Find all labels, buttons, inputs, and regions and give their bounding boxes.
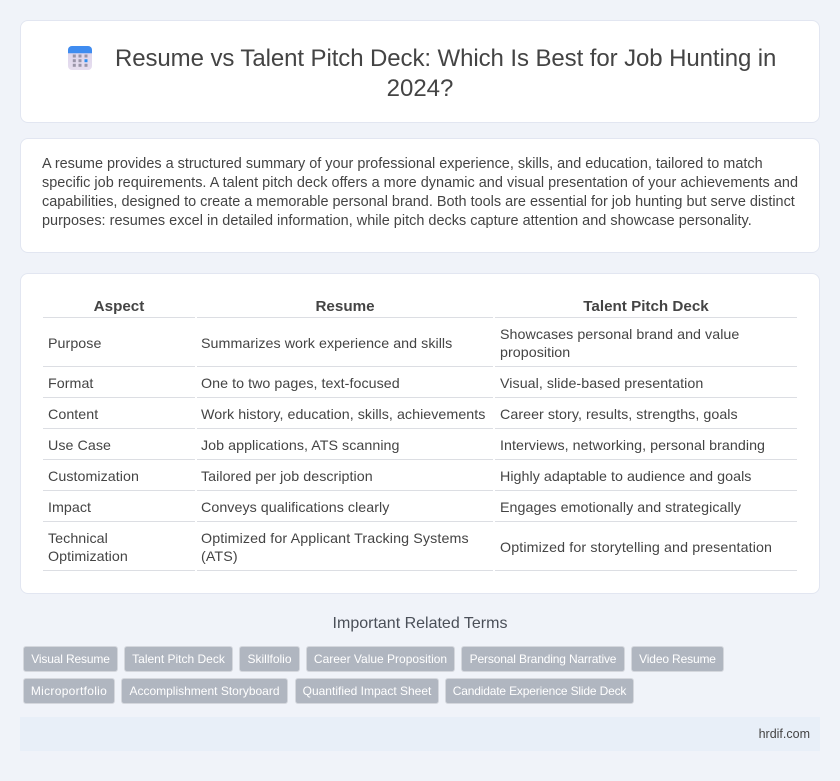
intro text: purposes: resumes excel in detailed information, while pitch decks capture attention and showcase personality. xyxy=(42,213,752,229)
title xyxy=(115,45,776,102)
row: Impact: Impact xyxy=(48,500,91,516)
tag: Video Resume xyxy=(639,652,716,666)
intro text: specific job requirements. A talent pitch deck offers a more dynamic and visual presentation of your achievements and xyxy=(42,175,798,191)
tag xyxy=(124,646,233,672)
row: Customization: Highly adaptable to audience and goals xyxy=(500,469,751,485)
row: Use Case xyxy=(48,438,765,454)
table header xyxy=(94,298,709,315)
tag xyxy=(461,646,625,672)
footer bar xyxy=(20,717,820,751)
row: Technical Optimization: Optimized for storytelling and presentation xyxy=(500,540,772,556)
intro text: A resume provides a structured summary of your professional experience, skills, and education, tailored to match xyxy=(42,156,763,172)
row: Technical Optimization: Technical xyxy=(48,531,108,547)
table panel xyxy=(20,273,820,594)
row: Use Case: Job applications, ATS scanning xyxy=(201,438,399,454)
row: Technical Optimization xyxy=(48,531,772,565)
table header: Resume xyxy=(315,298,375,315)
row: Format: One to two pages, text-focused xyxy=(201,376,400,392)
row: Use Case: Interviews, networking, personal branding xyxy=(500,438,765,454)
row: Impact: Engages emotionally and strategically xyxy=(500,500,741,516)
row: Purpose: Summarizes work experience and skills xyxy=(201,336,452,352)
tag: Quantified Impact Sheet xyxy=(303,684,431,698)
row: Technical Optimization: Optimized for Applicant Tracking Systems xyxy=(201,531,469,547)
tag: Microportfolio xyxy=(31,684,107,698)
row: Purpose: Purpose xyxy=(48,336,101,352)
row: Format: Format xyxy=(48,376,93,392)
row: Content: Career story, results, strengths, goals xyxy=(500,407,738,423)
related terms heading: Important Related Terms xyxy=(333,615,507,632)
row: Content: Content xyxy=(48,407,98,423)
row: Impact xyxy=(48,500,741,516)
row: Impact: Conveys qualifications clearly xyxy=(201,500,389,516)
row: Use Case: Use Case xyxy=(48,438,111,454)
row: Technical Optimization: (ATS) xyxy=(201,549,238,565)
intro text: capabilities, designed to create a memorable personal brand. Both tools are essential for job hunting but serve distinct xyxy=(42,194,795,210)
tag xyxy=(121,678,288,704)
row: Content xyxy=(48,407,738,423)
row: Purpose: Showcases personal brand and value xyxy=(500,327,739,343)
intro text xyxy=(42,156,798,229)
tag xyxy=(239,646,300,672)
tag: Accomplishment Storyboard xyxy=(129,684,280,698)
row: Purpose xyxy=(48,327,739,361)
tag xyxy=(295,678,439,704)
row: Format xyxy=(48,376,703,392)
tag: Talent Pitch Deck xyxy=(132,652,225,666)
tag: Skillfolio xyxy=(247,652,292,666)
related term tags xyxy=(23,646,724,704)
row: Customization: Customization xyxy=(48,469,139,485)
tag xyxy=(631,646,724,672)
tag: Candidate Experience Slide Deck xyxy=(453,684,626,698)
comparison table xyxy=(43,298,797,571)
intro panel xyxy=(20,138,820,253)
row: Purpose: proposition xyxy=(500,345,570,361)
tag: Personal Branding Narrative xyxy=(470,652,616,666)
tag xyxy=(23,678,115,704)
tag xyxy=(445,678,634,704)
tag: Career Value Proposition xyxy=(314,652,447,666)
row: Format: Visual, slide-based presentation xyxy=(500,376,703,392)
header panel xyxy=(20,20,820,123)
row: Content: Work history, education, skills, achievements xyxy=(201,407,485,423)
footer source: hrdif.com xyxy=(759,727,810,741)
tag: Visual Resume xyxy=(31,652,110,666)
tag xyxy=(306,646,455,672)
row: Customization: Tailored per job description xyxy=(201,469,373,485)
tag xyxy=(23,646,118,672)
row: Customization xyxy=(48,469,751,485)
row: Technical Optimization: Optimization xyxy=(48,549,128,565)
title: Resume vs Talent Pitch Deck: Which Is Best for Job Hunting in xyxy=(115,45,776,72)
title: 2024? xyxy=(387,75,453,102)
icon: calendar xyxy=(68,46,92,70)
table header: Talent Pitch Deck xyxy=(583,298,709,315)
table header: Aspect xyxy=(94,298,144,315)
